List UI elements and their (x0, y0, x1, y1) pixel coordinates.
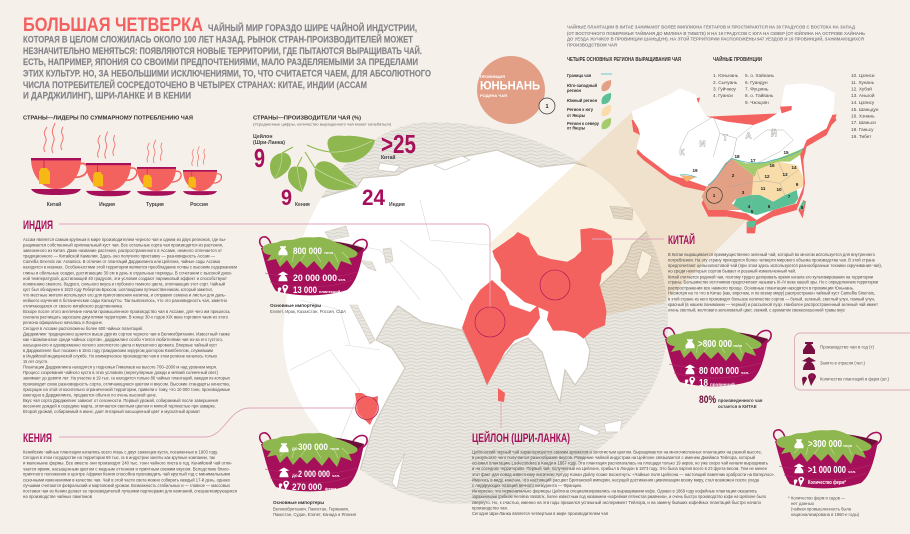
india text: Ассам является самым крупным в мире производителем черного чая и одним из двух регионов, где вы- (23, 237, 226, 242)
basket: kenya: до (292, 446, 298, 451)
legend: tea regions: Регион к северу (567, 121, 600, 126)
value: kenya (281, 185, 310, 210)
producers leaves chart (253, 129, 416, 210)
intro text: КОТОРАЯ В ЦЕЛОМ СЛОЖИЛАСЬ ОКОЛО 100 ЛЕТ НАЗАД. РЫНОК СТРАН-ПРОИЗВОДИТЕЛЕЙ МОЖЕТ (23, 34, 413, 44)
basket: china: 18 (699, 378, 708, 389)
list: tea provinces: 1. Юньнань (713, 73, 739, 78)
title: БОЛЬШАЯ ЧЕТВЕРКА (23, 15, 203, 36)
yunnan ring (706, 187, 722, 203)
section: india (23, 218, 237, 414)
map: china territory (492, 228, 614, 339)
kenya heading: КЕНИЯ (23, 431, 52, 445)
hollow china lettering: И (699, 139, 706, 149)
intro text: ЭТИХ КУЛЬТУР. НО, ЗА НЕБОЛЬШИМИ ИСКЛЮЧЕНИЯМИ, ТО, ЧТО СЧИТАЕТСЯ ЧАЕМ, ДЛЯ АБСОЛЮТНОГО (23, 68, 431, 78)
list: tea provinces: 19. Тибет (851, 134, 872, 139)
province numbers: 13 (782, 172, 788, 177)
intro text: ЧИСЛА ПОТРЕБИТЕЛЕЙ СОСРЕДОТОЧЕНО В ЧЕТЫРЕХ СТРАНАХ: КИТАЕ, ИНДИИ (АССАМ (23, 79, 367, 90)
kenya text: поставок чая из Кении делает ее производителей лучшими партнерами для компаний, специализирующихся (23, 488, 237, 494)
map land (632, 83, 835, 220)
india text: весенних дождей в середине марта, отличается светлым цветом и мягкой терпкостью при заварке. (23, 402, 216, 408)
value: ceylon: Цейлон (253, 133, 272, 140)
cups chart (31, 123, 221, 208)
china text: но среди некоторых сортов бывает и резаный измельченный чай. (668, 268, 796, 274)
india text: что местные жители используют его для приготовления напитка, и отправил семена и листья для даль- (23, 292, 226, 298)
china intro text: ДО УЕЗДА ЖУЧЖОУ В ПРОВИНЦИИ ШАНЬДУН). НА ЭТОЙ ТЕРРИТОРИИ РАСПОЛОЖЕНЫ 947 УЕЗДОВ И 19 ПРОВИНЦИЙ, ЗАНИМАЮЩИХСЯ (567, 35, 864, 43)
connector lines (59, 224, 664, 437)
cup: turkey (137, 140, 181, 196)
china export note (699, 394, 763, 409)
basket: ceylon (774, 430, 881, 488)
india text: региона официально началась в Лондоне. (23, 320, 103, 325)
china heading: КИТАЙ (668, 233, 695, 247)
legend: tea regions: Южный регион (567, 98, 597, 103)
hollow china lettering (679, 128, 777, 157)
india text: как «Шампанское среди чайных сортов», дарджилинг особо чтится любителями чая из-за его густого, (23, 336, 223, 342)
basket: kenya: до (292, 473, 298, 478)
yunnan circle badge: ПРОВИНЦИЯ (480, 74, 505, 79)
india text: Сегодня в Ассаме расположены более 600 чайных плантаций. (23, 325, 143, 331)
india text: 15 лет спустя. (23, 359, 48, 364)
line: kenya (59, 408, 356, 437)
china text (668, 251, 882, 313)
value: china: Китай (381, 154, 395, 161)
kenya importers: Пакистан, Судан, Египет, Канада и Япония (273, 512, 356, 517)
intro text: И ДАРДЖИЛИНГ), ШРИ-ЛАНКЕ И В КЕНИИ (23, 91, 191, 101)
china highlight beam (488, 112, 747, 322)
heading: consumption: СТРАНЫ—ЛИДЕРЫ ПО СУММАРНОМУ ПОТРЕБЛЕНИЮ ЧАЯ (23, 116, 193, 122)
legend labels: Занято в отрасли (чел.) (820, 360, 865, 366)
yunnan circle badge: 1 (545, 104, 549, 110)
leaf: ceylon (270, 147, 293, 179)
india text: Второй урожай, собираемый в июне, дает янтарный насыщенный цвет и мускатный аромат (23, 408, 201, 414)
kenya importers (273, 500, 356, 517)
province borders (680, 117, 798, 213)
province numbers: 2 (732, 173, 735, 178)
india importers: Основные импортеры (270, 303, 321, 308)
ceylon footnote: нет данных (791, 501, 815, 506)
map: kenya territory (355, 393, 378, 425)
value: india: Индия (389, 202, 405, 208)
india text: Camellia Sinensis var. Assamica. В отличие от плантаций Дарджилинга или Цейлона, чайные сады Ассама (23, 258, 220, 264)
india importers (270, 303, 347, 314)
cups chart: Индия (99, 202, 115, 208)
india text: насыщенного и одновременно легкого золотистого цвета и мускатного аромата. Впервые чайный куст (23, 341, 218, 347)
tibet patch (680, 175, 697, 182)
ceylon text: и на соседних территориях. Первый чай, полученный на Цейлоне, прибыл в Лондон в 1873 году. Это была партия всего в 23 фунта весом. Тем не менее (472, 465, 767, 471)
basket: ceylon: >1 000 000 (808, 465, 846, 476)
basket: ceylon: Количество ферм* (808, 479, 846, 486)
china export note: остается в КИТАЕ (718, 404, 757, 409)
china text: распространения все намного проще. Основные плантации находятся в провинции Юньнань. (668, 285, 854, 290)
ceylon text: производство чая. (472, 505, 508, 510)
kenya importers: Великобритания, Пакистан, Германия, (273, 506, 349, 512)
basket: ceylon: тонн (843, 443, 853, 448)
yunnan circle badge: ЮНЬНАНЬ (480, 80, 540, 92)
province numbers (692, 150, 804, 214)
basket: kenya: 2 000 000 (298, 469, 330, 480)
india text (23, 237, 237, 414)
list: tea provinces: 6. Гуандун (745, 80, 768, 85)
china text: очень светлый, желтовато-зеленоватый цвет, свежий, с ароматом свежескошенной травы вкус (668, 307, 846, 313)
basket: kenya: чел. (332, 473, 340, 478)
marker rings (356, 270, 570, 420)
list: tea provinces: 9. Чжэцзян (745, 100, 769, 105)
province numbers: 6 (768, 204, 771, 209)
legend labels (820, 344, 889, 382)
ceylon text: Имелось в виду, конечно, что настоящий расцвет Британской империи, несущей достижения цивилизации всему миру, стал возможен после ухода (472, 476, 759, 482)
list: tea provinces: 17. Шаньси (851, 120, 876, 125)
china text: потребления. На эту страну приходится более четверти мирового объема производства чая. В этой стране (668, 256, 875, 262)
hollow china lettering: Т (723, 133, 729, 143)
province numbers: 9 (796, 182, 799, 187)
hollow china lettering: К (679, 147, 685, 157)
section: ceylon (472, 431, 775, 516)
kenya importers: Основные импортеры (273, 500, 324, 505)
value: china: >25 (381, 129, 416, 159)
china text: в этой стране из него производят большое количество сортов — белый, зеленый, светлый улун, темный улун, (668, 295, 875, 301)
basket: china: тонн (733, 343, 743, 348)
india text: в Дарджилинге был посажен в 1841 году гражданским хирургом доктором Кэмпбеллом, служившим (23, 348, 213, 353)
basket: ceylon: чел. (848, 469, 856, 474)
kenya text: приятного положения в центре Африки Кения способна производить чай круглый год с минимальными (23, 471, 230, 477)
india text: глины и обильные осадки, достигающие 30 см в день в отдельные периоды. В сочетании с высокой днев- (23, 269, 232, 275)
china intro text (567, 22, 865, 49)
ceylon text: Интересно, что первоначально фермеры Цейлона специализировались на выращивании кофе. Однако в 1869 году кофейные плантации оказались (472, 488, 757, 494)
cups chart: Россия (190, 202, 208, 208)
heading: producers: (Усредненные цифры, количество выращенного чая может колебаться) (253, 122, 391, 126)
line: india (59, 224, 490, 307)
basket: china: чел. (741, 370, 749, 375)
cup: russia (183, 146, 221, 195)
line: ceylon (500, 402, 502, 428)
value: kenya: Кения (295, 202, 310, 208)
ceylon text: основал плантацию Loolecondera в Канди в 1867 году. Эта плантация располагалась на площади только 19 акров, но уже скоро чай начали выращивать (472, 460, 768, 466)
southwest region (702, 158, 755, 210)
legend: tea regions: от Янцзы (567, 126, 585, 130)
legend: tea regions: от Янцзы (567, 113, 585, 118)
province numbers: 15 (783, 150, 789, 155)
india text: занимает до девяти лет. На участке в 19 тыс. га находится только 86 чайных плантаций, каждая из которых (23, 375, 231, 381)
china text: Несмотря на то что в Китае (как, впрочем, и по всему миру) распространен чайный куст Camellia Sinensis, (668, 290, 875, 296)
list: tea provinces: 10. Цзянси (851, 73, 875, 78)
india text: появлению смелого, бодрого, сильного вкуса и глубокого темного цвета, отличающих этот сорт. Чайный (23, 280, 225, 286)
india text: завезенного из Китая. Даже название растения, распространенного в Ассаме, немного отличается от (23, 248, 223, 253)
list: tea provinces: 2. Сычуань (713, 80, 738, 85)
india text: Плантации Дарджилинга находятся у подножья Гималаев на высоте 700–2000 м над уровнем моря. (23, 365, 217, 370)
province numbers: 5 (751, 209, 754, 214)
india text: ращивается собственный оригинальный куст чая. Все остальные сорта чая производятся из растения, (23, 242, 223, 248)
list: tea provinces: 16. Хэнань (851, 114, 875, 118)
intro text: ЕСТЬ, НАПРИМЕР, ЯПОНИЯ СО СВОИМИ ПРЕДПОЧТЕНИЯМИ, МАЛО РАЗДЕЛЯЕМЫМИ ЗА ПРЕДЕЛАМИ (23, 57, 418, 67)
legend: tea regions: Юго-западный (567, 83, 597, 88)
leaf: china (307, 136, 375, 163)
ceylon footnote (788, 496, 860, 517)
ceylon text: в результате чего получается разнообразие вкусов. Рождение чайной индустрии на Цейлоне связывается с именем Джеймса Тейлора, который (472, 454, 755, 460)
china intro text: ЧАЙНЫЕ ПЛАНТАЦИИ В КИТАЕ ЗАНИМАЮТ БОЛЕЕ МИЛЛИОНА ГЕКТАРОВ И ПРОСТИРАЮТСЯ НА 30 ГРАДУСОВ С ВОСТОКА НА ЗАПАД (567, 22, 856, 30)
ceylon text: Цейлонский черный чай характеризуется свежим ароматом и золотистым цветом. Выращивается на многочисленных плантациях на разной высоте, (472, 448, 762, 454)
province numbers: 7 (788, 194, 791, 199)
india text: отличающаяся от своего китайского родственника. (23, 303, 123, 309)
india text: Дарджилинг традиционно ценится выше других сортов черного чая в Великобритании. Известный также (23, 330, 230, 336)
kenya text: Сегодня в этом государстве на территории 69 тыс. га в индустрии заняты как крупные компании, так (23, 455, 216, 460)
cup: india (86, 132, 137, 196)
basket: china: провинций (710, 381, 735, 387)
value: india (362, 185, 405, 210)
intro text (23, 22, 431, 101)
basket: china (664, 328, 771, 389)
basket: kenya: ферм (325, 486, 336, 491)
province numbers: 3 (742, 190, 745, 195)
india text: в Индийской медицинской службе. Но коммерческое производство чая в этом регионе началось только (23, 352, 217, 358)
icons (278, 246, 288, 294)
list: tea provinces: 13. Аньхой (851, 92, 875, 98)
basket: china: >800 000 (698, 339, 732, 350)
india text: ежегодно в Дарджилинге, продаются обычно по очень высокой цене. (23, 391, 157, 397)
province numbers: 16 (769, 163, 775, 168)
list: tea provinces (713, 72, 879, 139)
line: china (592, 238, 664, 240)
intro text: ЧАЙНЫЙ МИР ГОРАЗДО ШИРЕ ЧАЙНОЙ ИНДУСТРИИ, (208, 22, 417, 33)
india text: куст был обнаружен в 1823 году Робертом Брюсом, шотландским путешественником, который заметил, (23, 286, 213, 292)
value: india: 24 (362, 185, 386, 210)
south region (733, 190, 798, 215)
yangtze north region (732, 148, 803, 177)
hollow china lettering: А (745, 130, 752, 140)
ceylon footnote: * (788, 496, 790, 500)
kenya text: на производстве чайных пакетиков (23, 493, 92, 499)
province numbers: 10 (776, 187, 782, 192)
section: china (668, 233, 882, 313)
hainan (747, 221, 757, 233)
list: tea provinces: 4. Гуанси (713, 93, 733, 98)
india heading: ИНДИЯ (23, 218, 53, 232)
china text: Китай считается родиной чая, поэтому трудно датировать время начала его культивирования на территории (668, 273, 873, 279)
cups chart: Китай (47, 201, 61, 208)
kenya text: Кенийские чайные плантации начались всего лишь с двух саженцев куста, посаженных в 1903 году. (23, 449, 218, 455)
india text: ной температурой, достигающей 40 градусов, эти условия создают парниковый эффект и способствуют (23, 275, 228, 281)
kenya text: и маленькие фермы. Все вместе они производят 240 тыс. тонн чайного листа в год. Кенийский чай отли- (23, 460, 232, 466)
north coast red (697, 97, 837, 120)
value: ceylon (253, 133, 285, 173)
india text: сначала расчищать заросшие джунглями территории. В конце 30-х годов XIX века торговля чаем из этого (23, 315, 228, 320)
basket: india: 800 000 (293, 246, 322, 257)
china text: красный (в нашем понимании — черный) и рассыпной пуэр. Наиболее распространенный зеленый чай имеет (668, 301, 879, 307)
basket: india: плантаций (319, 289, 341, 294)
yangtze south region (752, 162, 803, 202)
india text: Процесс созревания чайного куста в этих условиях (нерегулярные дожди и мягкий солнечный свет) (23, 369, 218, 375)
basket: kenya: 300 000 (298, 442, 328, 453)
list: tea provinces: 7. Фуцзянь (745, 86, 769, 92)
india text: нейшего изучения в ботанические сады Калькутты. Так выяснилось, что это разновидность чая, заметно (23, 297, 227, 303)
ceylon text: этот факт дал повод известному писателю Артуру Конан Дойлу позже восхитнуть: «Чайные поля Цейлона — настоящий памятник храбрости на Ватерлоо». (472, 471, 775, 477)
list: tea provinces: 8. о. Тайвань (745, 92, 774, 98)
value: ceylon: 9 (254, 143, 265, 173)
cup: china (31, 123, 88, 195)
list: tea provinces: 18. Ганьсу (851, 127, 874, 132)
basket: india (260, 237, 367, 296)
yunnan circle badge: РОДИНА ЧАЯ (480, 93, 507, 98)
list: tea provinces: 5. о. Хайнань (745, 72, 775, 78)
ceylon heading: ЦЕЙЛОН (ШРИ-ЛАНКА) (472, 431, 570, 445)
ceylon text: Сегодня Шри-Ланка является четвертым в мире производителем чая (472, 511, 608, 516)
kenya text: лучшими считаются февральский и мартовский урожаи. Возможность стабильных и — главное — массовых (23, 482, 231, 488)
yunnan circle badge (477, 56, 555, 124)
legend labels: Количество плантаций и ферм (шт.) (820, 376, 889, 382)
list: tea provinces: 12. Хубэй (851, 86, 872, 92)
kenya text: чается ярким, насыщенным цветом с медным оттенком и приятным свежим вкусом. Вследствие благо- (23, 466, 230, 471)
india importers: Египет, Ирак, Казахстан, Россия, США (270, 309, 347, 314)
kenya text: сезонными изменениями в качестве чая. Чай в этой части света можно собирать каждый 17-й день, однако (23, 476, 230, 482)
world map globe (283, 122, 668, 504)
china intro text: (ОТ ВОСТОЧНОГО ПОБЕРЕЖЬЯ ТАЙВАНЯ ДО МИЛИНА В ТИБЕТЕ) И НА 19 ГРАДУСОВ С ЮГА НА СЕВЕР (ОТ ЮЙЛИНА НА ОСТРОВЕ ХАЙНАНЬ (567, 29, 865, 37)
hollow china lettering: Й (771, 128, 777, 139)
province numbers: 14 (791, 165, 797, 170)
china export note: 80% (699, 394, 716, 406)
heading: tea provinces: ЧАЙНЫЕ ПРОВИНЦИИ (713, 55, 762, 63)
province numbers: 12 (764, 174, 770, 179)
province numbers: 19 (692, 168, 698, 173)
leaf: india (305, 152, 357, 190)
province numbers: 1 (713, 193, 716, 198)
legend: tea regions: Регион к югу (567, 107, 594, 112)
icons (794, 439, 804, 486)
province numbers: 11 (761, 186, 766, 191)
province numbers: 17 (750, 158, 756, 163)
value: ceylon: (Шри-Ланка) (253, 140, 285, 146)
legend: tea regions: Граница чая (567, 73, 591, 78)
ceylon footnote: Количество ферм и садов — (791, 496, 846, 500)
basket: kenya: тонн (330, 446, 340, 451)
basket: india: 13 000 (293, 285, 317, 296)
province numbers: 4 (748, 204, 751, 209)
ceylon text: зараженными грибком Hemileia Vastatrix, более известным под названием «кофейная пятнистая ржавчина», и очень быстро производство кофе на Цейлоне было (472, 493, 766, 499)
ceylon text (472, 448, 775, 516)
ceylon footnote: (чайная промышленность была (791, 506, 852, 512)
intro text: НЕЗНАЧИТЕЛЬНО МЕНЯТЬСЯ: ПОЯВЛЯЮТСЯ НОВЫЕ ТЕРРИТОРИИ, ГДЕ ПЫТАЮТСЯ ВЫРАЩИВАТЬ ЧАЙ. (23, 45, 422, 56)
basket: kenya: 270 000 (292, 482, 322, 493)
value: kenya: 9 (281, 185, 292, 210)
list: tea provinces: 3. Гуйчжоу (713, 86, 737, 92)
heading: producers: СТРАНЫ—ПРОИЗВОДИТЕЛИ ЧАЯ (%) (253, 116, 361, 122)
india text: Вкус чая сорта Дарджилинг зависит от сезонности. Первый урожай, собираемый после завершения (23, 397, 218, 403)
legend labels: Производство чая в год (т) (820, 344, 874, 350)
ceylon text: свернуто. Но, к счастью, именно на эти годы пришелся успешный эксперимент Тейлора, и на замену бывших кофейных плантаций быстро начало (472, 499, 761, 505)
india text: производит свою разновидность сорта, отличающуюся цветом и вкусом. Высокие стандарты качества, (23, 381, 230, 386)
legend: tea regions: регион (567, 88, 581, 93)
india text: находятся в низинах. Особенностями этой территории являются преобладание почвы с высоким содержанием (23, 264, 237, 270)
map: india territory (462, 280, 540, 385)
icons (685, 339, 695, 386)
map shadow (632, 107, 837, 225)
list: tea provinces: 15. Шаньдун (851, 107, 879, 112)
province numbers: 18 (734, 154, 740, 159)
tea border line (680, 148, 803, 185)
basket: india: 20 000 000 (293, 273, 337, 284)
legend icons (802, 342, 816, 386)
icons (279, 443, 289, 490)
kenya text (23, 449, 237, 499)
legend: tea regions (567, 73, 612, 130)
india text: традиционного — Китайской Камелии. Здесь оно получило приставку — разновидность Ассам — (23, 253, 215, 259)
cups chart: Турция (146, 202, 164, 208)
map: sri lanka (498, 388, 505, 402)
china intro text: ПРОИЗВОДСТВОМ ЧАЯ (567, 43, 617, 49)
ceylon text: с лидирующих позиций вечного конкурента — Франции. (472, 482, 582, 488)
province numbers: 8 (801, 205, 804, 210)
basket: india: чел. (338, 277, 346, 282)
india text: Вскоре после этого англичане начали промышленное производство чая в Ассаме, для чего им пришлось (23, 309, 230, 314)
basket: ceylon: >300 000 (808, 439, 842, 450)
basket: kenya (260, 433, 367, 493)
leaf: kenya (288, 157, 307, 192)
india text: присущие на этой относительно ограниченной территории, привели к тому, что 10 000 тонн, производимые (23, 386, 230, 392)
china text: предпочитают цельнолистовой чай (при этом здесь используются разнообразные техники скручивания чая), (668, 262, 882, 268)
heading: producers (253, 116, 391, 126)
china provinces map (632, 83, 837, 233)
heading: tea regions: ЧЕТЫРЕ ОСНОВНЫХ РЕГИОНА ВЫРАЩИВАНИЯ ЧАЯ (567, 57, 681, 63)
section: kenya (23, 431, 237, 499)
legend box (794, 333, 910, 390)
china export note: произведенного чая (718, 398, 763, 403)
list: tea provinces: 11. Хунань (851, 80, 875, 85)
basket: china: 80 000 000 (699, 366, 739, 377)
taiwan (798, 200, 806, 218)
list: tea provinces: 14. Цзянсу (851, 100, 875, 105)
basket: india: тонн (324, 250, 334, 255)
china text: страны. Большинство источников предпочитают называть III–IV века нашей эры. Но с определением территории (668, 279, 878, 285)
china text: В Китае выращивается преимущественно зеленый чай, который во многом используется для внутреннего (668, 251, 875, 257)
ceylon footnote: национализирована в 1960-е годы) (791, 512, 860, 517)
